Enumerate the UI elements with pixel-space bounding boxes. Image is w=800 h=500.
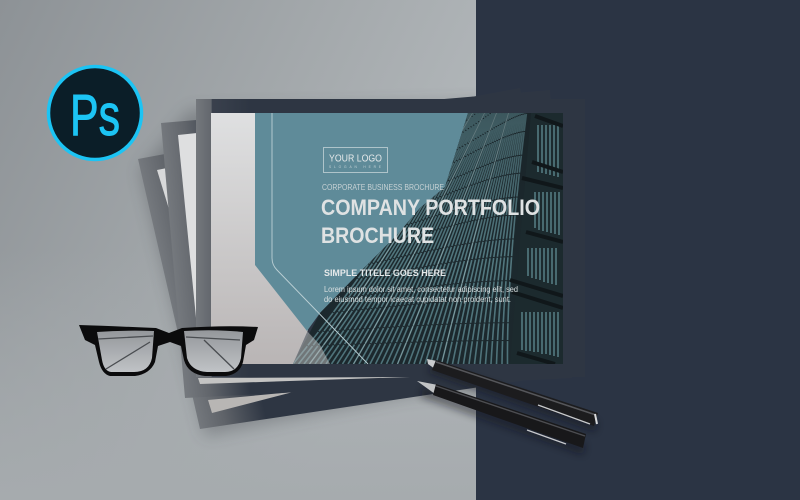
icon: Photoshop badge: Ps: [70, 83, 120, 148]
white page panel: [211, 113, 308, 364]
building photo: [290, 113, 563, 364]
tower windows: [510, 113, 563, 364]
body copy: Lorem ipsum dolor sit amet, consectetur adipiscing elit, sed: [324, 285, 518, 294]
pens: [417, 359, 598, 450]
left lens: [97, 331, 154, 372]
scene: brochure mockup: [0, 0, 598, 500]
cover frame: [196, 99, 585, 377]
logo box: YOUR LOGO: [329, 152, 382, 164]
back sheet: second brochure: [161, 90, 572, 398]
back sheet: third brochure: [138, 88, 580, 429]
main title: BROCHURE: [321, 223, 434, 248]
main title: [321, 195, 540, 248]
right lens: [184, 330, 243, 372]
grey tinted photo corner: [293, 331, 330, 364]
facade highlights: [310, 113, 508, 364]
subtitle: SIMPLE TITELE GOES HERE: [324, 268, 446, 279]
icon: Photoshop badge: [48, 66, 142, 160]
teal panel: [255, 113, 468, 331]
facade shading: [294, 113, 528, 364]
glasses: [79, 320, 258, 376]
body copy: [324, 285, 518, 304]
lower pen: [417, 381, 586, 448]
brochure stack shadow: [137, 96, 476, 440]
logo box: SLOGAN HERE: [329, 165, 382, 169]
glasses frame: [79, 325, 258, 376]
logo box: [324, 148, 388, 172]
main title: COMPANY PORTFOLIO: [321, 195, 540, 220]
upper pen: [427, 359, 598, 426]
eyebrow text: CORPORATE BUSINESS BROCHURE: [322, 182, 444, 192]
pen shadows: [422, 368, 596, 450]
facade lines: [293, 113, 526, 364]
body copy: do eiusmod tempor icaecat cupidatat non proident, sunt.: [324, 295, 511, 304]
front brochure cover: [196, 99, 585, 377]
glasses shadow: [85, 316, 250, 324]
glasses temples: [98, 336, 240, 369]
outline accent line: [272, 113, 368, 364]
